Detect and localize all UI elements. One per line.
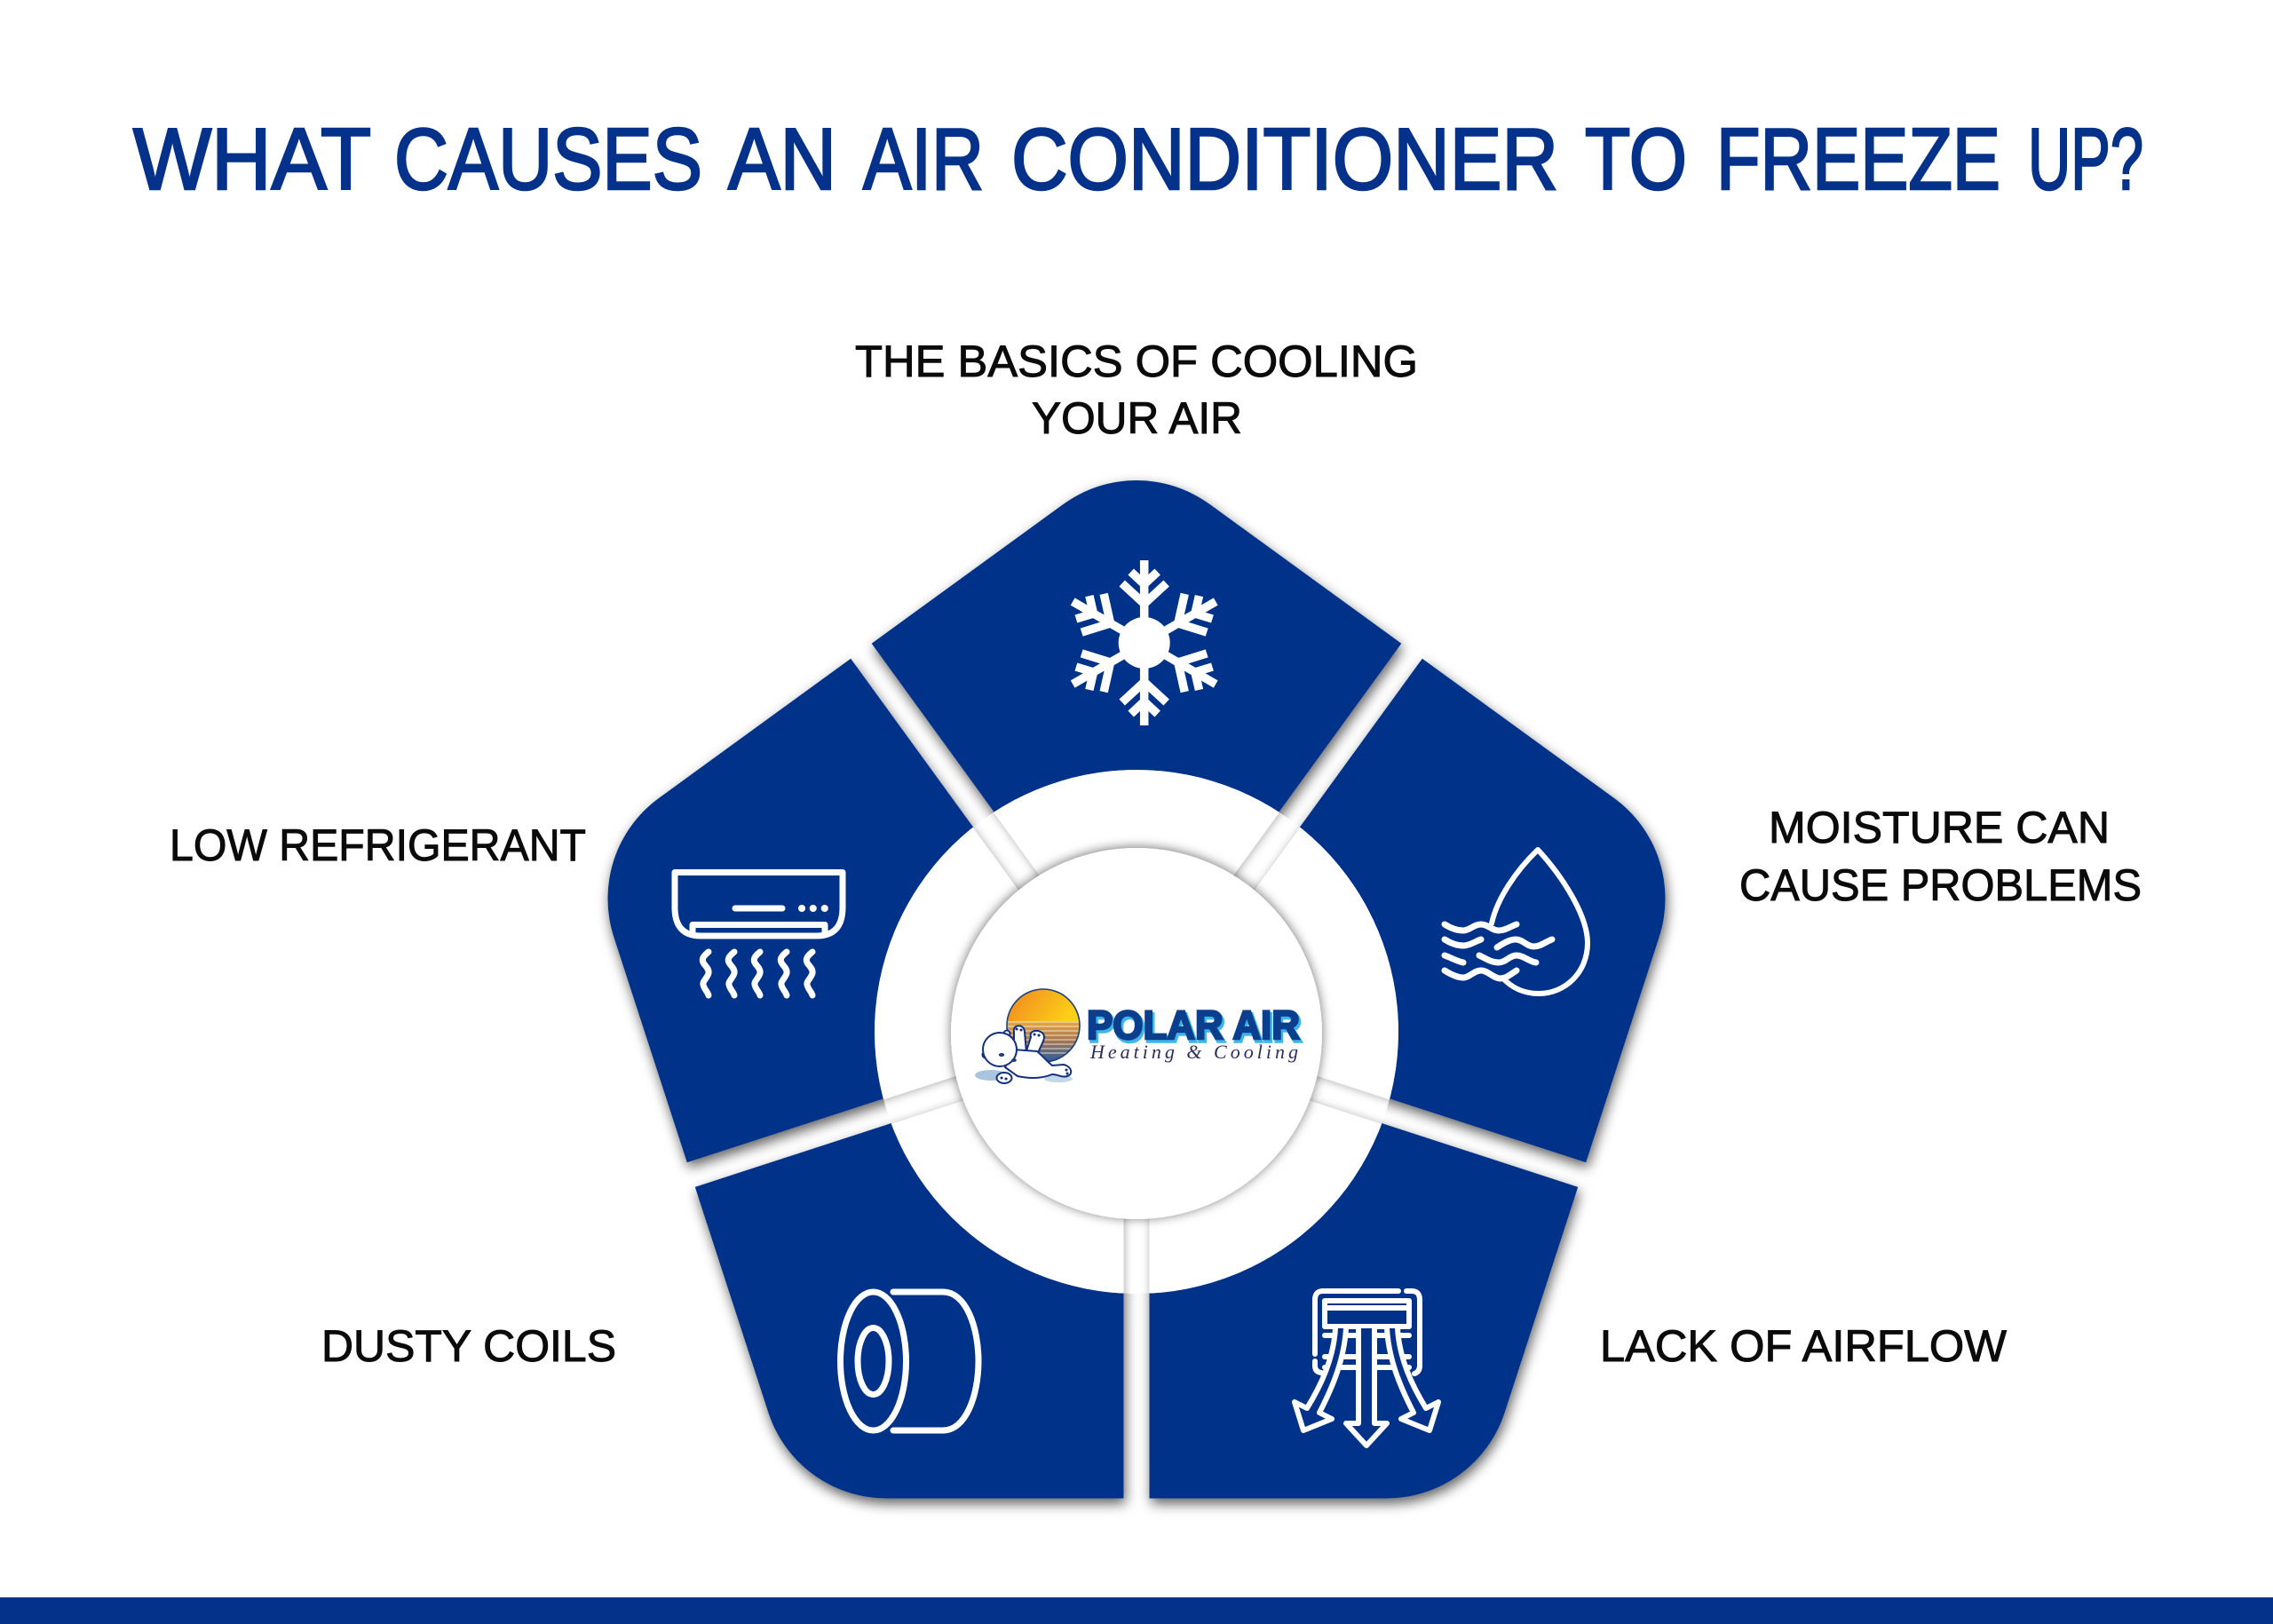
label: low refrigerant: LOW REFRIGERANT: [170, 820, 586, 870]
logo wordmark: POLAR AIR: [1087, 1002, 1300, 1048]
white ring: [875, 770, 1398, 1294]
label: moisture can cause problems: CAUSE PROBLEMS: [1739, 860, 2142, 910]
label: moisture can cause problems: [1739, 803, 2142, 910]
title: [133, 110, 2143, 208]
logo wordmark shadow: POLAR AIR: [1089, 1005, 1302, 1050]
panel: top segment: [872, 480, 1401, 1008]
logo sun: [1007, 989, 1080, 1061]
icon: water drop with waves: [1445, 850, 1588, 994]
title: AN: [728, 110, 836, 208]
panel: right segment: [1075, 608, 1741, 1275]
label: the basics of cooling your air: [855, 337, 1418, 443]
title: CONDITIONER: [1011, 110, 1558, 208]
title: CAUSES: [394, 110, 702, 208]
panel: left segment: [532, 608, 1198, 1275]
footer bar: [0, 1597, 2273, 1624]
label: the basics of cooling your air: YOUR AIR: [1032, 393, 1242, 443]
panel: bottom right segment: [935, 892, 1674, 1624]
title: WHAT: [133, 110, 371, 208]
icon: coil roll: [840, 1292, 978, 1430]
title: UP?: [2028, 110, 2143, 208]
icon: snowflake: [1062, 560, 1227, 725]
title: AIR: [863, 110, 984, 208]
logo: polar air: [975, 986, 1302, 1083]
label: lack of airflow: LACK OF AIRFLOW: [1600, 1321, 2008, 1371]
logo tagline: Heating & Cooling: [1089, 1041, 1298, 1063]
label: the basics of cooling your air: THE BASICS OF COOLING: [855, 337, 1418, 386]
label: dusty coils: DUSTY COILS: [321, 1321, 616, 1371]
icon: airflow vent with arrows: [1295, 1291, 1438, 1446]
icon: air conditioner: [675, 872, 843, 995]
logo bear: [975, 1026, 1073, 1083]
title: FREEZE: [1716, 110, 2000, 208]
title: TO: [1585, 110, 1687, 208]
label: moisture can cause problems: MOISTURE CAN: [1769, 803, 2110, 852]
panel: bottom left segment: [599, 892, 1338, 1624]
center circle: [951, 848, 1322, 1219]
